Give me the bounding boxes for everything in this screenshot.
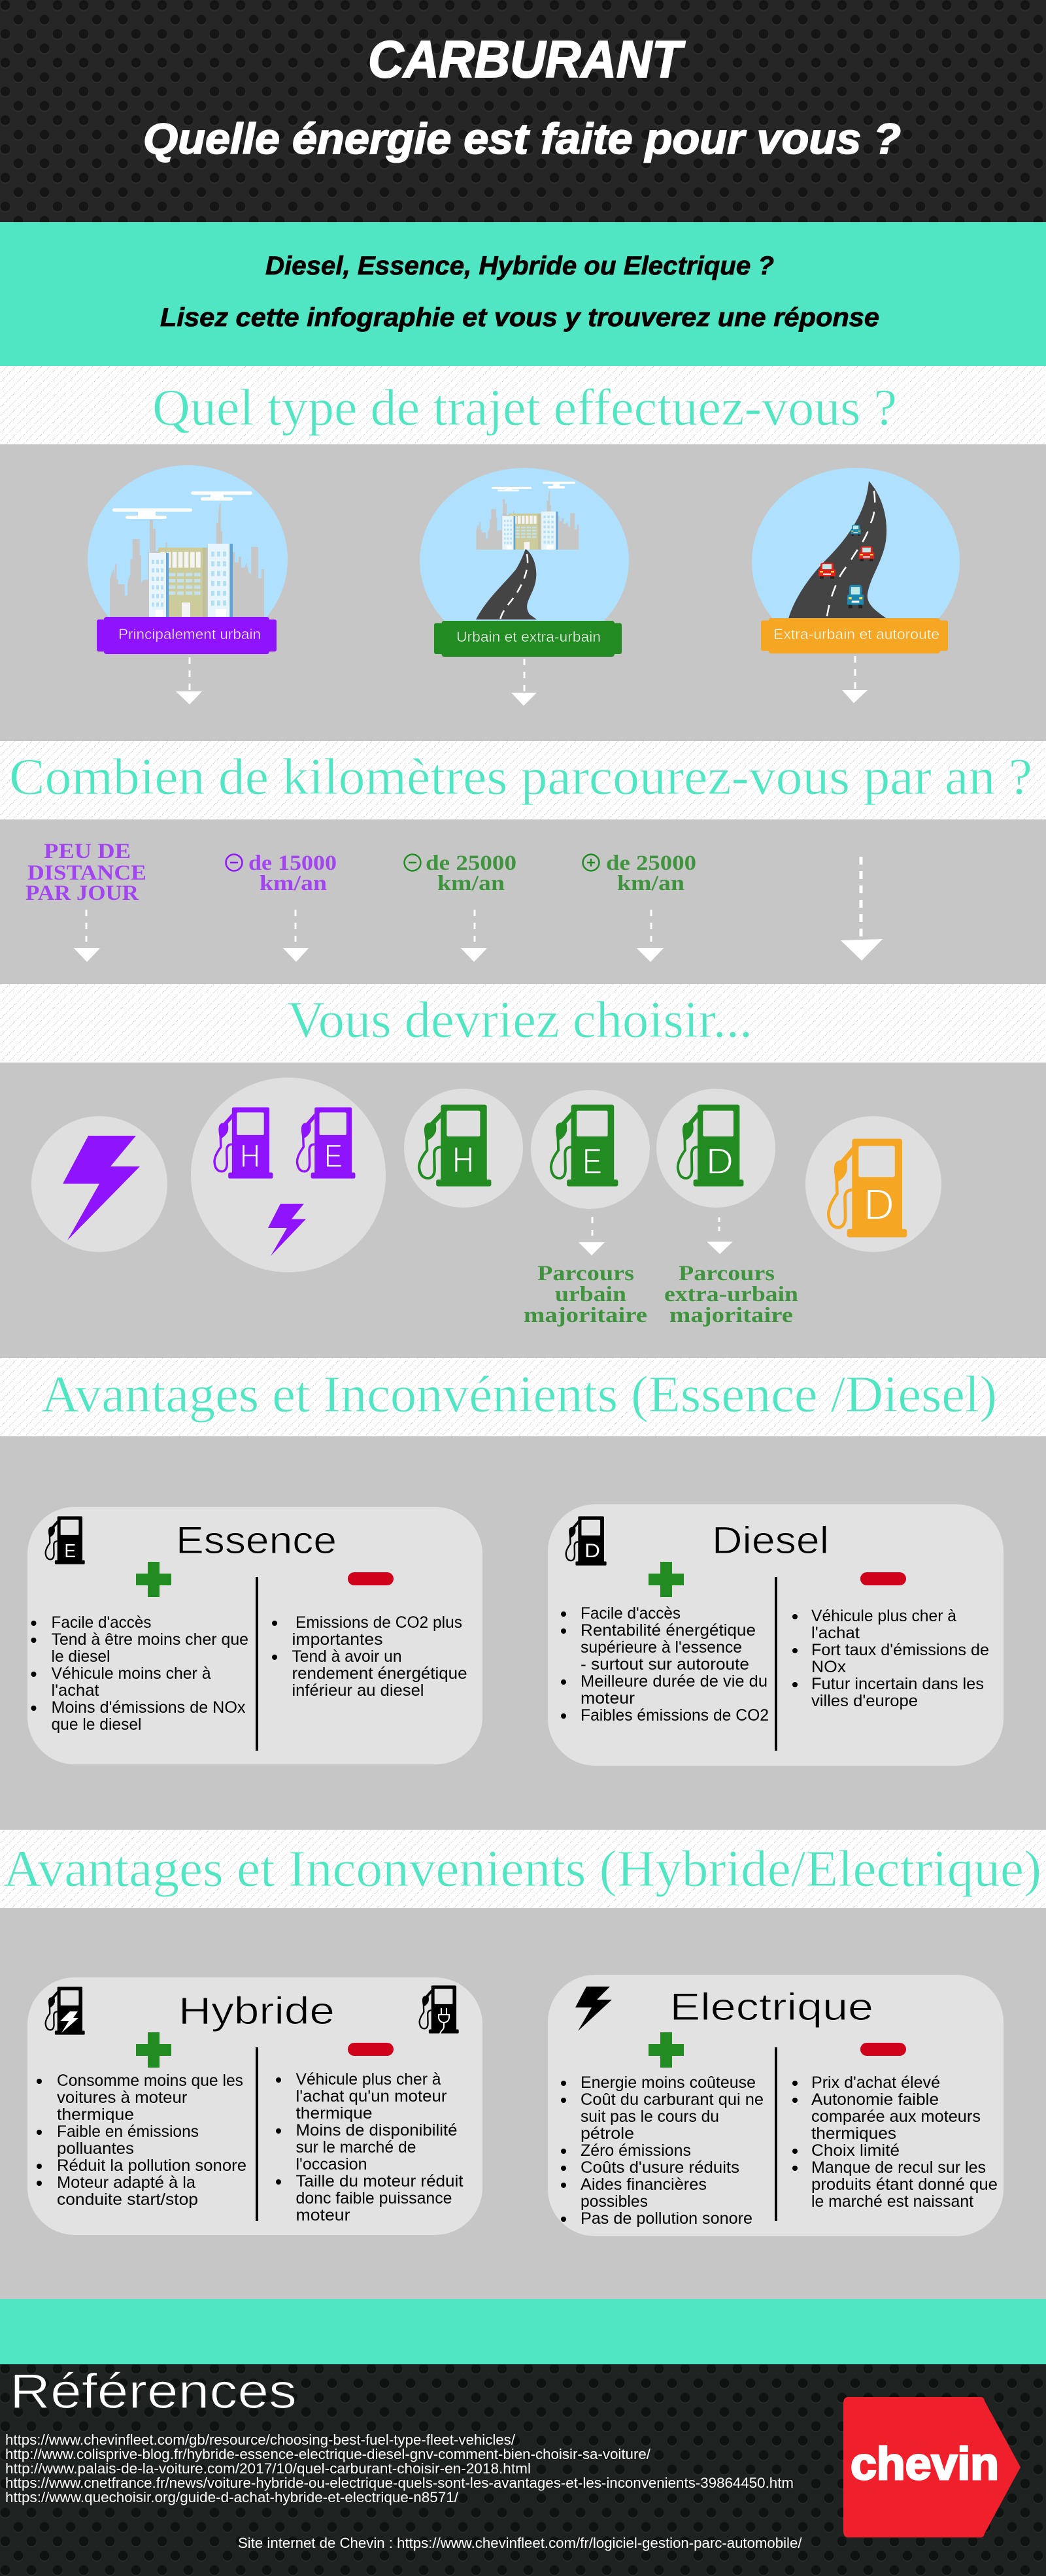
list: essence advantages: que le diesel xyxy=(51,1715,141,1734)
list: reference links: http://www.colisprive-blog.fr/hybride-essence-electrique-diesel-gnv-comment-bien-choisir-sa-voiture/ xyxy=(5,2446,651,2462)
icon: minus xyxy=(860,2043,906,2056)
list: essence advantages: l'achat xyxy=(51,1681,99,1700)
icon: hybrid, petrol and electric: E xyxy=(324,1138,343,1174)
panel: introduction xyxy=(0,222,1046,366)
illustration: urban and road globe xyxy=(420,468,629,622)
heading: vous devriez choisir: Vous devriez choisir... xyxy=(287,992,752,1049)
list: hybrid advantages: voitures à moteur xyxy=(57,2089,187,2107)
arrow xyxy=(461,910,487,962)
icon: diesel orange xyxy=(805,1116,941,1252)
text: parcours urbain majoritaire: urbain xyxy=(555,1283,626,1306)
text: parcours extra-urbain majoritaire: majoritaire xyxy=(669,1304,793,1327)
list: hybrid drawbacks: donc faible puissance xyxy=(295,2189,452,2207)
icon: diesel orange: D xyxy=(864,1180,894,1229)
list: reference links: http://www.palais-de-la-voiture.com/2017/10/quel-carburant-choisir-en-2018.html xyxy=(5,2460,531,2477)
list: essence advantages: Véhicule moins cher à xyxy=(51,1664,211,1683)
panel: essence xyxy=(27,1507,482,1764)
panel: references footer xyxy=(0,2364,1046,2576)
icon: hybrid: H xyxy=(452,1139,474,1180)
icon: electric xyxy=(31,1116,167,1252)
panel: distance per year xyxy=(0,819,1046,984)
icon: bolt xyxy=(575,1987,612,2031)
list: essence drawbacks: importantes xyxy=(292,1630,383,1649)
list: hybrid advantages: polluantes xyxy=(57,2139,134,2158)
list: electric drawbacks: Autonomie faible xyxy=(811,2090,939,2109)
divider xyxy=(256,1577,258,1751)
text: parcours urbain majoritaire: Parcours xyxy=(537,1262,634,1285)
divider xyxy=(256,2047,258,2221)
list: diesel drawbacks: Futur incertain dans les xyxy=(811,1675,984,1693)
label: urbain et extra-urbain xyxy=(434,621,622,657)
list: essence drawbacks: Emissions de CO2 plus xyxy=(295,1613,462,1632)
list: electric drawbacks: thermiques xyxy=(811,2124,896,2143)
logo: chevin xyxy=(843,2397,1021,2537)
list: hybrid advantages: Consomme moins que les xyxy=(57,2072,243,2090)
card title: Electrique xyxy=(669,1986,873,2028)
icon: petrol: E xyxy=(582,1140,602,1181)
icon: plus xyxy=(649,1562,684,1597)
card title: Diesel xyxy=(712,1519,829,1562)
list: hybrid advantages: thermique xyxy=(57,2105,134,2124)
list: hybrid drawbacks: Moins de disponibilité xyxy=(295,2121,458,2139)
icon: hybrid, petrol and electric: H xyxy=(240,1138,260,1174)
list: reference links xyxy=(5,2432,794,2505)
text: moins de 25000: de 25000 xyxy=(426,851,516,875)
text: moins de 15000: km/an xyxy=(260,872,327,895)
icon: hybrid xyxy=(404,1089,523,1208)
label: urbain et extra-urbain: Urbain et extra-urbain xyxy=(456,629,601,645)
list: electric drawbacks: Prix d'achat élevé xyxy=(811,2073,940,2092)
list: electric drawbacks: comparée aux moteurs xyxy=(811,2107,981,2126)
icon: hybrid pump with bolt xyxy=(46,1987,85,2035)
divider xyxy=(775,2047,777,2221)
icon: plus xyxy=(136,2032,171,2068)
text: parcours extra-urbain majoritaire: Parcours xyxy=(679,1262,775,1285)
heading: type de trajet xyxy=(0,366,1046,444)
heading: essence diesel: Avantages et Inconvénients (Essence /Diesel) xyxy=(41,1366,997,1423)
list: reference links: https://www.quechoisir.org/guide-d-achat-hybride-et-electrique-n8571/ xyxy=(5,2489,459,2505)
icon: diesel green: D xyxy=(706,1140,734,1181)
list: electric advantages: Coûts d'usure réduits xyxy=(581,2158,739,2177)
list: reference links: https://www.chevinfleet.com/gb/resource/choosing-best-fuel-type-fleet-vehicles/ xyxy=(5,2432,516,2448)
website line: Site internet de Chevin : https://www.chevinfleet.com/fr/logiciel-gestion-parc-automobile/ xyxy=(238,2535,802,2551)
list: electric drawbacks xyxy=(792,2073,998,2211)
list: diesel drawbacks: Véhicule plus cher à xyxy=(811,1607,956,1625)
text: plus de 25000 xyxy=(583,851,696,895)
icon: minus xyxy=(860,1572,906,1585)
list: electric drawbacks: Manque de recul sur les xyxy=(811,2158,986,2177)
title: CARBURANT xyxy=(368,30,686,88)
intro question: Diesel, Essence, Hybride ou Electrique ? xyxy=(265,252,774,280)
heading: vous devriez choisir xyxy=(0,984,1046,1063)
text: plus de 25000: de 25000 xyxy=(606,851,696,875)
list: electric advantages: Pas de pollution sonore xyxy=(581,2209,752,2228)
list: diesel advantages: moteur xyxy=(581,1689,635,1708)
list: diesel drawbacks xyxy=(792,1607,989,1710)
icon: diesel pump xyxy=(566,1516,607,1566)
arrow xyxy=(579,1217,605,1255)
text: parcours urbain majoritaire xyxy=(524,1262,647,1327)
list: reference links: https://www.cnetfrance.fr/news/voiture-hybride-ou-electrique-quels-sont-les-avantages-et-les-inconvenients-39864450.htm xyxy=(5,2475,794,2491)
text: moins de 15000 xyxy=(226,851,337,895)
heading: kilometres xyxy=(0,741,1046,819)
list: diesel advantages: Meilleure durée de vie du xyxy=(581,1672,768,1691)
list: essence advantages: le diesel xyxy=(51,1647,110,1666)
list: essence advantages: Moins d'émissions de NOx xyxy=(51,1698,246,1717)
list: essence drawbacks: Tend à avoir un xyxy=(292,1647,401,1666)
text: peu de distance par jour: PAR JOUR xyxy=(25,882,139,905)
list: hybrid drawbacks: l'achat qu'un moteur xyxy=(295,2087,447,2105)
list: electric advantages: Aides financières xyxy=(581,2175,707,2194)
intro sentence: Lisez cette infographie et vous y trouverez une réponse xyxy=(160,303,879,332)
list: hybrid drawbacks: sur le marché de xyxy=(295,2138,416,2156)
subtitle: Quelle énergie est faite pour vous ? xyxy=(143,114,901,163)
text: parcours urbain majoritaire: majoritaire xyxy=(524,1304,647,1327)
arrow xyxy=(283,910,309,962)
panel: title header xyxy=(0,0,1046,222)
panel: recommendations xyxy=(0,1063,1046,1358)
arrow xyxy=(74,910,100,962)
teal band xyxy=(0,2299,1046,2364)
list: electric advantages: Zéro émissions xyxy=(581,2141,691,2160)
icon: diesel pump: D xyxy=(584,1540,600,1562)
text: moins de 25000 xyxy=(404,851,516,895)
panel: essence and diesel xyxy=(0,1436,1046,1830)
list: diesel drawbacks: NOx xyxy=(811,1658,847,1676)
icon: petrol xyxy=(531,1090,650,1209)
list: essence advantages xyxy=(31,1613,248,1734)
list: diesel advantages xyxy=(561,1604,769,1725)
heading: essence diesel xyxy=(0,1358,1046,1436)
card title: Essence xyxy=(176,1519,337,1562)
list: electric advantages: possibles xyxy=(581,2192,648,2211)
divider xyxy=(775,1577,777,1751)
text: parcours extra-urbain majoritaire: extra-urbain xyxy=(664,1283,798,1306)
list: hybrid drawbacks: Taille du moteur réduit xyxy=(295,2172,464,2190)
list: electric drawbacks: Choix limité xyxy=(811,2141,900,2160)
panel: trip types xyxy=(0,444,1046,741)
label: extra-urbain et autoroute xyxy=(761,618,948,653)
arrow xyxy=(842,656,868,703)
heading: type de trajet: Quel type de trajet effectuez-vous ? xyxy=(152,380,897,437)
icon: essence pump: E xyxy=(64,1541,76,1562)
list: diesel advantages: - surtout sur autoroute xyxy=(581,1655,749,1674)
illustration: motorway globe xyxy=(752,468,960,619)
list: essence advantages: Tend à être moins cher que xyxy=(51,1630,248,1649)
arrow xyxy=(511,659,537,706)
list: diesel drawbacks: l'achat xyxy=(811,1624,860,1642)
references heading: Références xyxy=(10,2364,297,2419)
text: peu de distance par jour: DISTANCE xyxy=(27,861,146,885)
list: hybrid drawbacks: Véhicule plus cher à xyxy=(295,2070,441,2089)
list: hybrid advantages: Faible en émissions xyxy=(57,2122,199,2141)
list: electric advantages xyxy=(561,2073,764,2228)
label: principalement urbain xyxy=(97,617,277,654)
text: parcours extra-urbain majoritaire xyxy=(664,1262,798,1327)
text: peu de distance par jour: PEU DE xyxy=(44,840,131,863)
icon: plus xyxy=(136,1562,171,1597)
list: electric advantages: suit pas le cours du xyxy=(581,2107,719,2126)
label: extra-urbain et autoroute: Extra-urbain et autoroute xyxy=(773,626,939,642)
list: electric drawbacks: le marché est naissant xyxy=(811,2192,973,2211)
list: electric drawbacks: produits étant donné que xyxy=(811,2175,998,2194)
panel: diesel xyxy=(548,1504,1004,1766)
list: essence advantages: Facile d'accès xyxy=(51,1613,152,1632)
icon: minus xyxy=(348,1572,394,1585)
card title: Hybride xyxy=(178,1990,335,2032)
text: peu de distance par jour xyxy=(25,840,146,905)
heading: hybride electrique: Avantages et Inconvenients (Hybride/Electrique) xyxy=(3,1841,1041,1898)
icon: plus xyxy=(649,2032,684,2068)
list: diesel drawbacks: villes d'europe xyxy=(811,1692,918,1710)
heading: kilometres: Combien de kilomètres parcourez-vous par an ? xyxy=(9,749,1032,806)
list: essence drawbacks: rendement énergétique xyxy=(292,1664,467,1683)
list: diesel advantages: Rentabilité énergétique xyxy=(581,1621,756,1640)
text: moins de 25000: km/an xyxy=(437,872,505,895)
list: electric advantages: pétrole xyxy=(581,2124,634,2143)
icon: minus xyxy=(348,2043,394,2056)
list: electric advantages: Coût du carburant qui ne xyxy=(581,2090,764,2109)
icon: diesel green xyxy=(656,1089,775,1208)
list: electric advantages: Energie moins coûteuse xyxy=(581,2073,756,2092)
list: essence drawbacks: inférieur au diesel xyxy=(292,1681,424,1700)
illustration: urban globe xyxy=(88,465,288,618)
panel: hybride xyxy=(27,1977,482,2235)
list: hybrid advantages: Moteur adapté à la xyxy=(57,2173,195,2192)
arrow xyxy=(637,910,664,962)
arrow xyxy=(176,657,202,704)
arrow xyxy=(707,1217,733,1254)
list: hybrid advantages: conduite start/stop xyxy=(57,2190,198,2209)
list: diesel advantages: supérieure à l'essence xyxy=(581,1638,742,1657)
list: essence drawbacks xyxy=(272,1613,467,1700)
list: hybrid drawbacks xyxy=(276,2070,464,2224)
list: diesel drawbacks: Fort taux d'émissions de xyxy=(811,1641,989,1659)
list: hybrid drawbacks: l'occasion xyxy=(295,2155,367,2173)
label: principalement urbain: Principalement urbain xyxy=(118,626,261,642)
list: hybrid drawbacks: thermique xyxy=(295,2104,373,2122)
panel: electrique xyxy=(548,1975,1004,2236)
list: hybrid drawbacks: moteur xyxy=(295,2206,350,2224)
list: hybrid advantages: Réduit la pollution sonore xyxy=(57,2156,246,2175)
logo: chevin: chevin xyxy=(851,2438,999,2489)
list: hybrid advantages xyxy=(37,2072,246,2209)
icon: hybrid, petrol and electric xyxy=(191,1078,386,1272)
list: diesel advantages: Faibles émissions de CO2 xyxy=(581,1706,769,1725)
arrow: large xyxy=(841,857,883,961)
list: diesel advantages: Facile d'accès xyxy=(581,1604,681,1623)
icon: hybrid pump with plug xyxy=(420,1985,459,2034)
text: plus de 25000: km/an xyxy=(617,872,684,895)
panel: hybride and electrique xyxy=(0,1908,1046,2299)
text: moins de 15000: de 15000 xyxy=(248,851,337,875)
icon: essence pump xyxy=(46,1516,85,1564)
